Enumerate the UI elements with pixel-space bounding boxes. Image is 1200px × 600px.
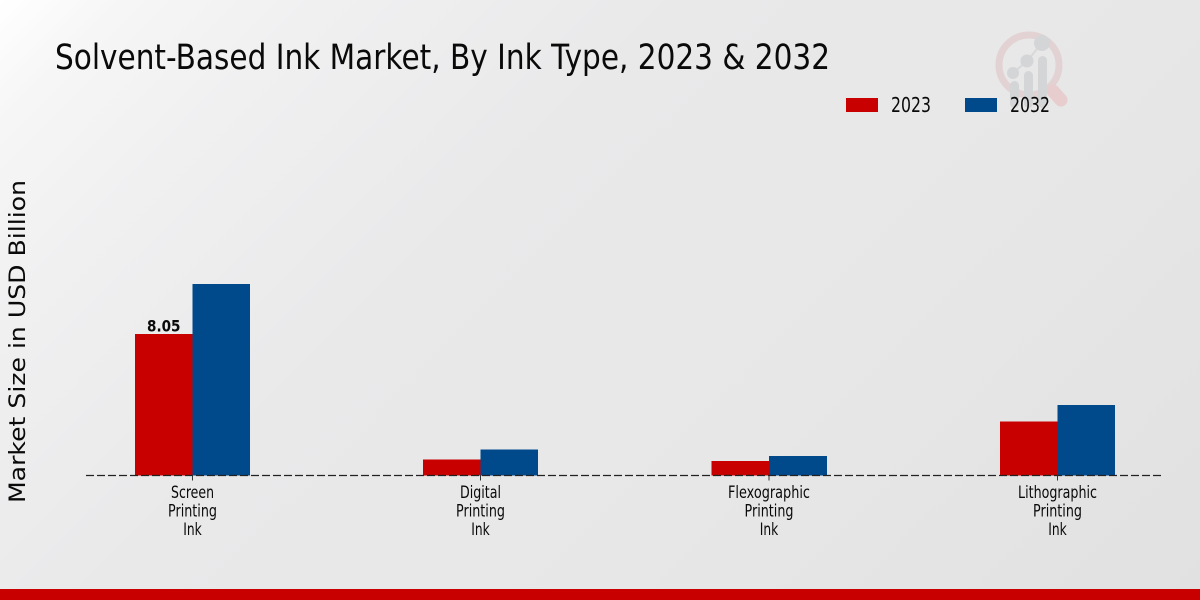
- x label: Digital Printing Ink: Ink: [471, 520, 490, 539]
- x label: Digital Printing Ink: Digital: [460, 483, 501, 502]
- icon: watermark logo: [999, 35, 1061, 108]
- legend item: 2023: 2023: [891, 93, 931, 117]
- x label: Screen Printing Ink: Screen: [171, 483, 214, 502]
- x label: Lithographic Printing Ink: [1018, 483, 1097, 539]
- x label: Screen Printing Ink: Printing: [168, 502, 217, 520]
- x label: Flexographic Printing Ink: [728, 483, 810, 539]
- x label: Screen Printing Ink: Ink: [183, 520, 202, 539]
- x label: Flexographic Printing Ink: Flexographic: [728, 483, 810, 502]
- bars: Screen Printing Ink: [135, 284, 250, 476]
- title: Solvent-Based Ink Market, By Ink Type, 2023 & 2032: [55, 38, 830, 78]
- legend item: 2023: [846, 93, 931, 117]
- x label: Lithographic Printing Ink: Ink: [1048, 520, 1067, 539]
- value label: 8.05: [147, 316, 180, 336]
- bar chart: [86, 284, 1164, 480]
- footer bar: [0, 589, 1200, 600]
- x label: Digital Printing Ink: [456, 483, 505, 539]
- x label: Screen Printing Ink: [168, 483, 217, 539]
- legend item: 2032: 2032: [1010, 93, 1050, 117]
- legend item: 2032: [965, 93, 1050, 117]
- x label: Lithographic Printing Ink: Lithographic: [1018, 483, 1097, 502]
- x label: Digital Printing Ink: Printing: [456, 502, 505, 520]
- x label: Flexographic Printing Ink: Ink: [760, 520, 779, 539]
- y axis label: Market Size in USD Billion: [5, 180, 31, 503]
- legend: [846, 93, 1050, 117]
- bars: Lithographic Printing Ink: [1000, 405, 1115, 476]
- x label: Lithographic Printing Ink: Printing: [1033, 502, 1082, 520]
- bars: Flexographic Printing Ink: [712, 456, 827, 476]
- bars: Digital Printing Ink: [423, 450, 538, 476]
- axis ticks: [192, 476, 1058, 480]
- x label: Flexographic Printing Ink: Printing: [744, 502, 794, 520]
- axis baseline: [86, 474, 1164, 476]
